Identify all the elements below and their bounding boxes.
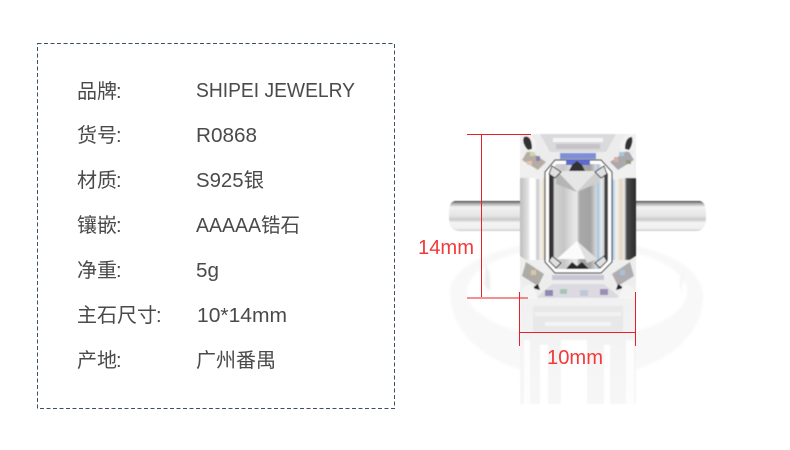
row: material [77, 169, 264, 192]
row: item number: R0868 [196, 125, 257, 147]
row: origin: 产地: [77, 349, 122, 372]
row: setting: 镶嵌: [77, 214, 122, 237]
emerald-cut diamond [520, 134, 636, 298]
row: origin: 广州番禺 [196, 349, 276, 372]
row: brand: 品牌: [77, 80, 122, 103]
panel: product specifications [38, 44, 394, 408]
prongs [521, 134, 636, 298]
row: material: S925银 [196, 169, 264, 192]
row: brand [77, 80, 355, 103]
row: net weight: 5g [196, 260, 219, 282]
dimension: 10mm width [520, 292, 636, 369]
row: brand: SHIPEI JEWELRY [196, 80, 355, 102]
crown facets: bottom [520, 256, 636, 298]
row: item number [77, 124, 257, 147]
row: origin [77, 349, 276, 372]
inner step-cut table [545, 160, 612, 273]
row: net weight [77, 259, 219, 282]
ghost reflection of ring band [450, 240, 703, 378]
ring band [449, 201, 706, 231]
row: main stone size: 10*14mm [197, 305, 287, 327]
ring illustration [449, 134, 706, 404]
row: net weight: 净重: [77, 259, 122, 282]
row: main stone size: 主石尺寸: [77, 304, 162, 327]
row: main stone size [77, 304, 287, 327]
ghost reflection of stone [520, 298, 636, 404]
row: setting [77, 214, 300, 237]
row: item number: 货号: [77, 124, 122, 147]
dimension: 10mm width: 10mm [547, 347, 603, 369]
dimension: 14mm height: 14mm [418, 237, 474, 259]
row: material: 材质: [77, 169, 122, 192]
crown facets: top [520, 134, 636, 180]
row: setting: AAAAA锆石 [196, 214, 300, 237]
